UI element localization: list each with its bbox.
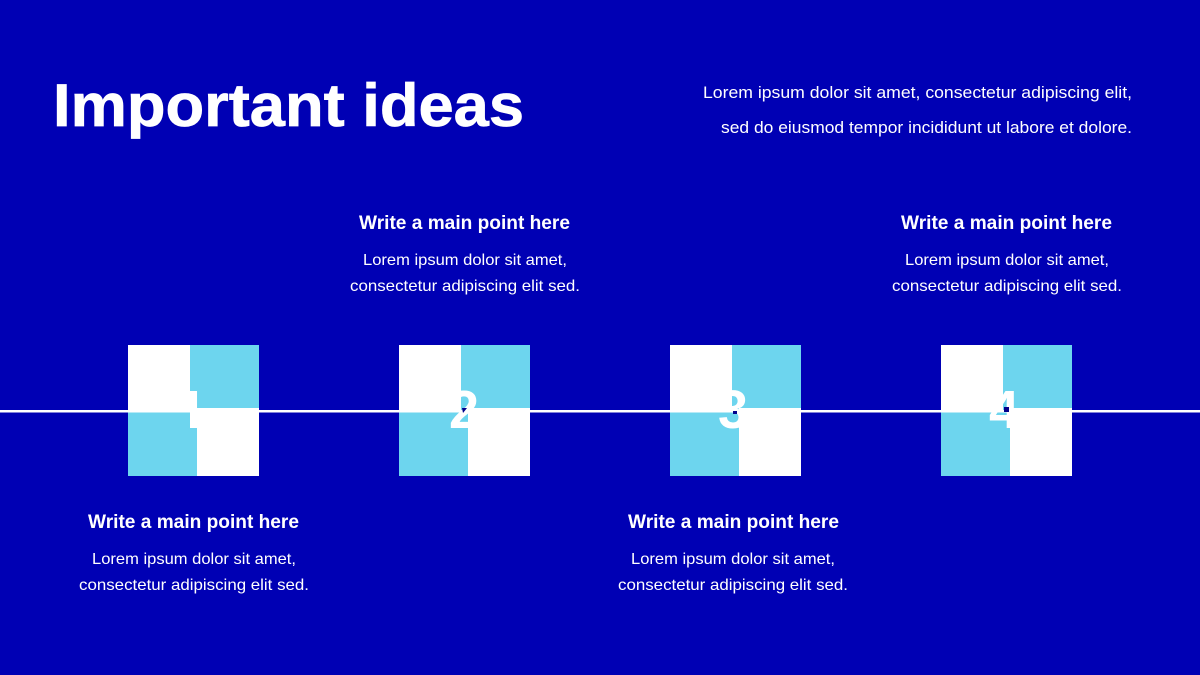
step 3 tile: 3: [718, 380, 748, 440]
title: Important ideas: [53, 72, 524, 139]
step 1 text: consectetur adipiscing elit sed.: [79, 577, 309, 594]
intro paragraph: sed do eiusmod tempor incididunt ut labore et dolore.: [721, 118, 1132, 137]
step 2 text: Write a main point here: [359, 212, 570, 234]
step 1 text: Lorem ipsum dolor sit amet,: [92, 551, 296, 568]
intro paragraph: Lorem ipsum dolor sit amet, consectetur adipiscing elit,: [703, 83, 1132, 102]
step 2 text: Lorem ipsum dolor sit amet,: [363, 252, 567, 269]
intro paragraph: [703, 83, 1132, 137]
step 3 text: consectetur adipiscing elit sed.: [618, 577, 848, 594]
step 4 text: Lorem ipsum dolor sit amet,: [905, 252, 1109, 269]
step 2 tile: [399, 345, 530, 476]
step 1 tile: 1: [177, 380, 207, 440]
step 4 text: consectetur adipiscing elit sed.: [892, 278, 1122, 295]
step 4 tile: [941, 345, 1072, 476]
step 1 text: Write a main point here: [88, 511, 299, 533]
step 3 text: [618, 511, 848, 594]
step 4 text: Write a main point here: [901, 212, 1112, 234]
step 1 tile: [128, 345, 259, 476]
infographic canvas: [0, 82, 1200, 594]
step 2 text: [350, 212, 580, 295]
step 3 text: Lorem ipsum dolor sit amet,: [631, 551, 835, 568]
step 1 text: [79, 511, 309, 594]
step 2 text: consectetur adipiscing elit sed.: [350, 278, 580, 295]
step 3 text: Write a main point here: [628, 511, 839, 533]
timeline line: [0, 410, 1200, 412]
number overlap marks: [462, 407, 1009, 414]
step 2 tile: 2: [449, 380, 479, 440]
step 4 text: [892, 212, 1122, 295]
step 3 tile: [670, 345, 801, 476]
step 4 tile: 4: [989, 380, 1019, 440]
